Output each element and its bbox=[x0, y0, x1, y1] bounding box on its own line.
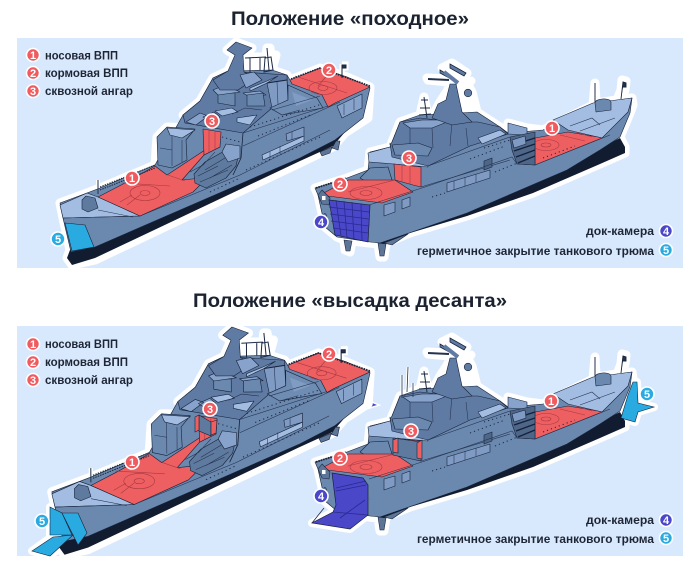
badges: ship callouts: 2 bbox=[337, 179, 343, 191]
legend: dock and hold: герметичное закрытие танкового трюма bbox=[417, 246, 655, 258]
badges: ship callouts: 5 bbox=[39, 516, 45, 528]
legend: runways and hangar: 2 bbox=[30, 68, 36, 80]
ship: stern view with open dock bbox=[312, 337, 654, 531]
panel: высадка десанта bbox=[17, 326, 683, 556]
badges: ship callouts bbox=[35, 347, 654, 528]
legend: dock and hold: док-камера bbox=[586, 226, 655, 238]
legend: dock and hold bbox=[417, 514, 672, 546]
legend: runways and hangar: сквозной ангар bbox=[45, 375, 133, 387]
badges: ship callouts: 4 bbox=[318, 491, 325, 503]
legend: dock and hold: 4 bbox=[663, 226, 670, 238]
badges: ship callouts: 3 bbox=[207, 404, 213, 416]
badges: ship callouts: 1 bbox=[129, 457, 135, 469]
legend: runways and hangar: 1 bbox=[30, 339, 36, 351]
legend: runways and hangar: 2 bbox=[30, 357, 36, 369]
badges: ship callouts: 1 bbox=[129, 173, 135, 185]
badges: ship callouts: 5 bbox=[644, 389, 650, 401]
badges: ship callouts: 3 bbox=[406, 153, 412, 165]
ship: stern view bbox=[315, 63, 633, 257]
badges: ship callouts bbox=[51, 63, 559, 246]
legend: dock and hold: 5 bbox=[663, 245, 669, 257]
title: высадка десанта: Положение «высадка десанта» bbox=[193, 290, 507, 312]
legend: dock and hold: док-камера bbox=[586, 515, 655, 527]
badges: ship callouts: 3 bbox=[209, 116, 215, 128]
badges: ship callouts: 2 bbox=[326, 65, 332, 77]
legend: runways and hangar: 3 bbox=[30, 86, 36, 98]
badges: ship callouts: 2 bbox=[326, 349, 332, 361]
panel: походное bbox=[17, 38, 683, 268]
legend: runways and hangar bbox=[26, 48, 133, 98]
legend: runways and hangar: кормовая ВПП bbox=[45, 357, 128, 369]
legend: dock and hold: 5 bbox=[663, 533, 669, 545]
badges: ship callouts: 1 bbox=[549, 123, 555, 135]
ship: bow view with open ramp bbox=[32, 326, 377, 556]
badges: ship callouts: 1 bbox=[548, 396, 554, 408]
badges: ship callouts: 4 bbox=[318, 217, 325, 229]
legend: dock and hold: 4 bbox=[663, 515, 670, 527]
badges: ship callouts: 2 bbox=[337, 453, 343, 465]
legend: runways and hangar: носовая ВПП bbox=[45, 50, 118, 62]
title: походное: Положение «походное» bbox=[231, 8, 469, 30]
legend: runways and hangar: кормовая ВПП bbox=[45, 68, 128, 80]
legend: dock and hold bbox=[417, 224, 672, 258]
badges: ship callouts: 5 bbox=[55, 234, 61, 246]
legend: runways and hangar: носовая ВПП bbox=[45, 339, 118, 351]
legend: runways and hangar: 3 bbox=[30, 375, 36, 387]
legend: runways and hangar bbox=[26, 338, 133, 387]
badges: ship callouts: 3 bbox=[408, 426, 414, 438]
ship: bow view bbox=[60, 42, 370, 265]
legend: runways and hangar: 1 bbox=[30, 50, 36, 62]
legend: runways and hangar: сквозной ангар bbox=[45, 86, 133, 98]
legend: dock and hold: герметичное закрытие танкового трюма bbox=[417, 534, 655, 546]
